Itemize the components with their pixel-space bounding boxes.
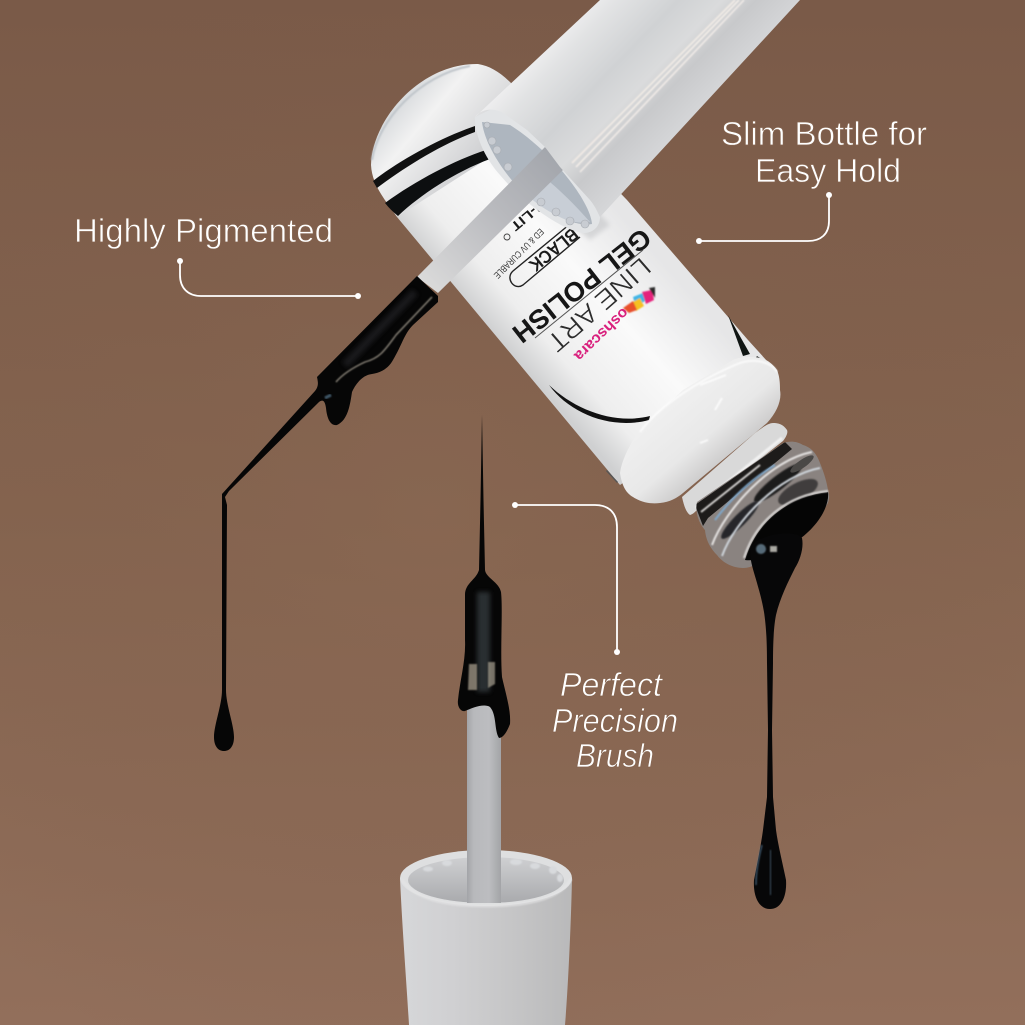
cap interior (475, 105, 600, 233)
neck ring (682, 423, 787, 515)
label: perfect precision brush: Brush (576, 737, 654, 774)
lit text: I-LIT (508, 201, 544, 234)
cap highlight streaks (572, 0, 744, 172)
cup front edge (402, 879, 571, 906)
bottle dome top (371, 64, 530, 217)
shoulder collar (620, 357, 780, 503)
brand name: oshscara (570, 304, 632, 365)
brand logo (623, 287, 655, 313)
body stripes (373, 126, 775, 483)
upright brush polish (458, 415, 510, 738)
soft shadow under cap (505, 140, 610, 240)
label: perfect precision brush (512, 502, 678, 774)
upright stem (467, 700, 501, 903)
label: slim bottle (696, 115, 927, 244)
cup rim (400, 850, 572, 906)
leader line (512, 502, 620, 655)
label text (491, 201, 657, 365)
thread highlights (712, 452, 812, 545)
label: slim bottle: Slim Bottle for (721, 115, 927, 152)
leader line (177, 258, 361, 299)
inner stem reflection (477, 592, 490, 692)
line art text: LINE ART (541, 251, 657, 357)
bottle body (397, 110, 777, 485)
glass thread neck (695, 442, 829, 568)
pill: black (510, 224, 580, 287)
bottle opening (745, 492, 828, 560)
label: perfect precision brush: Perfect (560, 666, 664, 703)
cup inner ridge dots (423, 859, 563, 882)
thread dark gaps (753, 463, 802, 502)
leader line (696, 192, 832, 244)
cup body (400, 878, 572, 1025)
paint pour stream (750, 533, 803, 909)
label: highly pigmented (74, 212, 361, 299)
applicator stem (417, 147, 565, 293)
tilted brush with dripping polish (214, 276, 438, 751)
brush highlight (336, 297, 432, 382)
cap (475, 0, 800, 217)
stream highlights (756, 845, 762, 885)
label text: BLACK (525, 224, 582, 275)
inner ridge dots (484, 122, 589, 228)
metallic band (695, 442, 792, 526)
label: highly pigmented: Highly Pigmented (74, 212, 333, 249)
label: slim bottle: Easy Hold (755, 152, 901, 189)
label: perfect precision brush: Precision (552, 702, 678, 739)
product name: GEL POLISH (507, 222, 657, 349)
bottom cap with upright brush (400, 700, 572, 1025)
bottle (371, 64, 829, 568)
small cured text: ED & UV CURABLE (491, 226, 546, 280)
